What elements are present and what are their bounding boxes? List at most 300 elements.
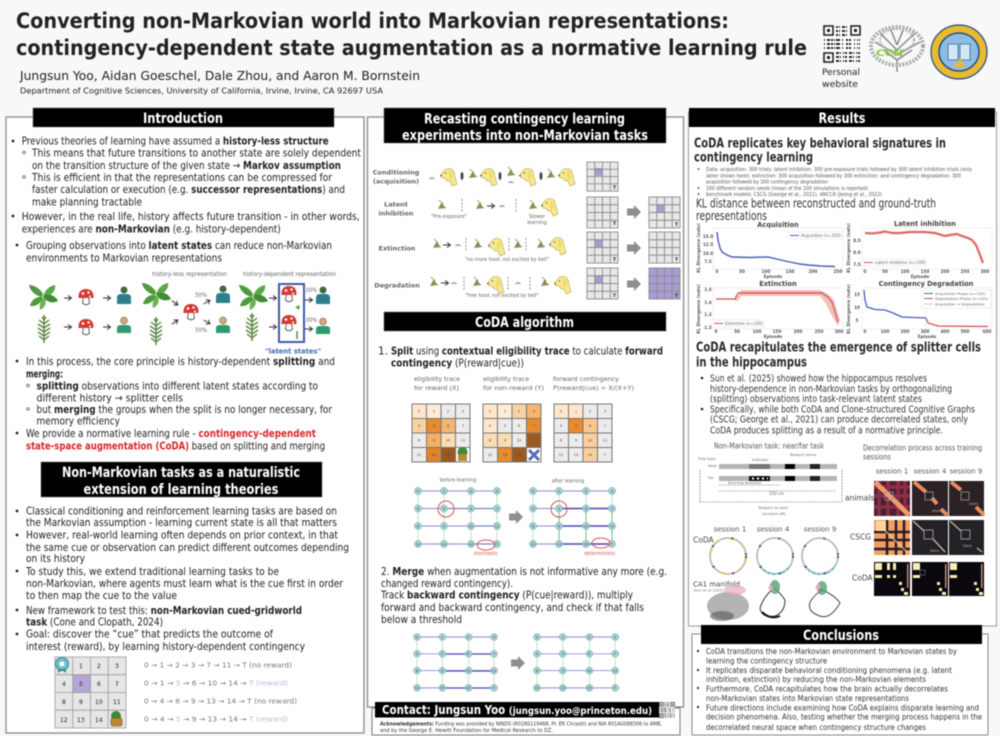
graph: merge after: 3 (614, 635, 616, 639)
chart: extinction: 1.4 (704, 300, 712, 305)
chart: extinction: 250 (815, 329, 823, 334)
chart: extinction (696, 280, 843, 339)
graph: merge after: 14 (587, 686, 592, 690)
illustration: conditioning row (428, 167, 575, 186)
figure: decorrelation heatmaps: sessions (863, 452, 891, 462)
figure: CoDA ring manifolds: session 9 (804, 526, 836, 534)
graph: merge before: 8 (416, 669, 419, 673)
graph: before learning: 8 (417, 524, 420, 528)
arrow (511, 656, 525, 670)
chart: acquisition: 15.0 (703, 234, 713, 239)
chart: contingency degradation: 300 (921, 329, 929, 334)
graph: merge after: 6 (588, 652, 591, 656)
grid captions: for reward (X) (414, 384, 459, 392)
trajectories list: 0 → 1 → 2 → 3 → 7 → 11 → T (no reward) (144, 662, 292, 670)
chart: contingency degradation: Episode (918, 334, 936, 339)
grid: eligibility trace for non-reward: 13 (503, 453, 507, 457)
grid: eligibility trace for non-reward: 6 (518, 424, 521, 428)
grid: forward contingency: 14 (588, 453, 593, 457)
trajectories list: 0 → 1 → 5 → 6 → 10 → 14 → T (reward) (144, 680, 288, 688)
grid captions: for non-reward (Y) (483, 384, 544, 392)
heading: non-markovian tasks: Non-Markovian tasks as a naturalistic (62, 465, 300, 481)
grid: eligibility trace for reward: 12 (417, 453, 421, 457)
text block: hippocampus (701, 374, 975, 436)
subheading: splitter cells (696, 340, 981, 370)
text block: markov assumption (12, 136, 361, 264)
heatmap: animals session 1 (874, 481, 910, 516)
figure: decorrelation heatmaps: CoDA (852, 574, 873, 582)
chart: cued gridworld: 2 (97, 663, 101, 670)
title (16, 9, 807, 60)
contingency grids: T (675, 257, 679, 263)
chart: latent inhibition: Latent inhibition (n=100) (875, 260, 926, 265)
graph: before learning: before learning (440, 478, 476, 484)
row labels: (acquisition) (373, 178, 419, 186)
graph: merge before: 1 (441, 635, 443, 639)
graph: merge before: 14 (466, 686, 471, 690)
grid: eligibility trace for reward: 0 (418, 410, 421, 414)
graph: merge before: 6 (467, 652, 470, 656)
text block: splitting and merging: merging: (26, 368, 63, 380)
text block: non-markovian tasks: on its history (26, 553, 85, 565)
chart: latent inhibition: 50 (882, 269, 888, 274)
graph: after learning: 7 (611, 507, 613, 511)
diagram: near/far task: Trial type (697, 456, 716, 461)
graph: merge before: 2 (467, 635, 469, 639)
chart: cued gridworld (55, 657, 126, 728)
figure: decorrelation heatmaps (845, 444, 984, 596)
chart: acquisition: Episode (764, 274, 782, 279)
affiliation: Department of Cognitive Sciences, University of California, Irvine, Irvine, CA 92697 USA (20, 86, 384, 96)
chart: contingency degradation: 500 (961, 329, 969, 334)
graph: before learning: 12 (416, 542, 420, 546)
grid: forward contingency: 10 (588, 438, 593, 442)
graph: merge before: 11 (492, 669, 496, 673)
figure: CoDA ring manifolds: session 1 (714, 526, 746, 534)
graph: merge after: T (613, 686, 617, 690)
grid: forward contingency: 0 (560, 410, 563, 414)
graph: merge after: 5 (562, 652, 564, 656)
chart: contingency degradation: Degradation Phase (n=100) (935, 296, 989, 301)
chart: extinction: 300 (835, 329, 843, 334)
text block: non-markovian tasks: the same cue or observation can predict different outcomes depending (26, 542, 349, 554)
grid: eligibility trace for reward: 6 (447, 424, 450, 428)
text block: merge: forward and backward contingency, and check if that falls (381, 602, 644, 614)
heading: non-markovian tasks: extension of learning theories (84, 482, 278, 498)
text block: split: 1. (378, 346, 388, 358)
panel frame (6, 117, 364, 733)
heading: conclusions: Conclusions (803, 628, 879, 644)
chart: extinction: Extinction (n=100) (725, 321, 763, 326)
chart: contingency degradation: 200 (901, 329, 909, 334)
grid: eligibility trace for reward: 14 (446, 453, 451, 457)
grid: eligibility trace for reward: 7 (462, 424, 464, 428)
grid: eligibility trace for reward: 5 (433, 424, 435, 428)
grid: eligibility trace for non-reward: 10 (517, 438, 522, 442)
chart: latent inhibition: 0 (864, 269, 867, 274)
graph: after learning: 11 (610, 524, 614, 528)
graph: after learning: 6 (585, 507, 588, 511)
text block: splitting and merging: memory efficiency (36, 416, 120, 428)
graph: merge after: 11 (613, 669, 617, 673)
chart: acquisition: Acquisition (n=100) (801, 233, 841, 238)
panel: results (688, 108, 996, 626)
text block: splitting and merging: different history → splitter cells (36, 392, 183, 404)
graph: before learning: 1 (443, 489, 445, 493)
methods notes: latter shown here); extinction: 300 acquisition followed by 300 extinction; and contingency degradation: 300 (706, 174, 961, 180)
graph: merge after: 12 (535, 686, 539, 690)
title: Converting non-Markovian world into Markovian representations: (16, 9, 729, 33)
subheading: behavioral signatures (694, 136, 946, 166)
grid: forward contingency: 9 (575, 438, 578, 442)
diagram: near/far task: Near (708, 463, 718, 468)
chart: cued gridworld: 3 (115, 663, 119, 670)
grid: forward contingency: 6 (589, 424, 592, 428)
grid: eligibility trace for non-reward: 8 (489, 438, 492, 442)
graph: before learning: 5 (443, 507, 445, 511)
chart: acquisition (696, 221, 843, 279)
graph: after learning: 1 (558, 489, 560, 493)
text block: hippocampus: Sun et al. (2025) showed how the hippocampus resolves (710, 374, 927, 384)
grid: eligibility trace for non-reward: 7 (533, 424, 535, 428)
heatmap: CoDA session 4 (912, 562, 948, 596)
acknowledgements: Acknowledgements: Funding was provided by NINDS (R01NS119468, PI: ER Chrastil) and NIA R01AG088306 to AMB, (380, 722, 662, 728)
graph: before learning: 9 (443, 524, 446, 528)
diagram: near/far task: Reward zones (790, 452, 816, 457)
graph: before learning: 6 (470, 507, 473, 511)
methods notes: benchmark models: CSCG (George et al., 2021), ANCCR (Jeong et al., 2022) (706, 192, 882, 198)
figure: history-less vs history-dependent representations: "latent states" (265, 348, 321, 356)
graph: after learning: T (610, 542, 614, 546)
graph: merge after: 9 (562, 669, 565, 673)
contact box (372, 702, 680, 735)
illustration: latent inhibition row: "Pre-exposure" (431, 214, 467, 220)
graph: after learning: deterministic (584, 551, 616, 557)
text block: split (378, 346, 663, 370)
contingency grids (587, 162, 680, 299)
heatmap: CoDA session 1 (874, 562, 910, 596)
chart: contingency degradation: 600 (983, 329, 991, 334)
figure: decorrelation heatmaps: Decorrelation process across training (863, 444, 982, 452)
diagram: near/far task: 230 cm (769, 491, 784, 496)
grid: eligibility trace for non-reward: 12 (488, 453, 492, 457)
grid: forward contingency: 11 (603, 438, 607, 442)
graph: after learning: 14 (584, 542, 589, 546)
grid: forward contingency (554, 404, 612, 462)
grid: forward contingency: T (603, 453, 607, 457)
graph: before learning: T (495, 542, 499, 546)
grid: eligibility trace for non-reward: 9 (504, 438, 507, 442)
chart: contingency degradation (846, 280, 992, 339)
heading: CoDA algorithm (384, 312, 666, 331)
contingency grids: T (613, 293, 617, 299)
text block: non-markovian tasks: task (Cone and Clopath, 2024) (26, 616, 163, 628)
chart: cued gridworld: 9 (79, 699, 83, 706)
graph: after learning: 4 (532, 507, 535, 511)
graph: before learning (414, 478, 501, 557)
text block: markov assumption: Previous theories of learning have assumed a history-less structure (22, 136, 329, 148)
grid captions: eligibility trace (483, 375, 529, 383)
row labels: inhibition (378, 210, 414, 218)
chart: extinction: 50 (734, 329, 740, 334)
graph: merge after: 1 (562, 635, 564, 639)
grid: eligibility trace for reward: 11 (461, 438, 465, 442)
figure: history-less vs history-dependent representations: history-dependent representation (243, 270, 336, 278)
grid: forward contingency: 12 (559, 453, 563, 457)
grid: forward contingency: 5 (575, 424, 577, 428)
chart: extinction: 150 (773, 329, 781, 334)
frame (372, 708, 680, 735)
graph: before learning: 0 (417, 489, 420, 493)
text block: non-markovian tasks (16, 506, 349, 653)
chart: latent inhibition: 8.5 (853, 238, 861, 243)
chart: latent inhibition: Episode (911, 274, 929, 279)
text block: markov assumption: This is efficient in that the representations can be compressed for (31, 172, 333, 184)
chart: contingency degradation: Acquisition Phase (n=100) (935, 291, 986, 296)
text block: conclusions: Furthermore, CoDA recapitulates how the brain actually decorrelates (706, 684, 948, 694)
figure: history-less vs history-dependent representations: 100% (303, 316, 317, 324)
text block: merge: below a threshold (381, 614, 462, 626)
figure: history-less vs history-dependent representations (29, 270, 336, 356)
graph: merge before: 12 (415, 686, 419, 690)
heatmap: CSCG session 4 (912, 520, 948, 555)
diagram: near/far task: Far (708, 475, 714, 480)
graph: merge before (413, 634, 498, 691)
text block: hippocampus: CoDA produces splitting as a result of a normative principle. (710, 426, 943, 436)
chart: extinction: Extinction (759, 280, 797, 288)
illustration: latent inhibition row: learning (527, 220, 547, 226)
text block: split: Split using contextual eligibility trace to calculate forward (391, 346, 663, 358)
grid: eligibility trace for non-reward (483, 404, 541, 462)
contingency grids: T (675, 293, 679, 299)
diagram: near/far task (697, 442, 842, 516)
figure: decorrelation heatmaps: session 1 (876, 468, 908, 476)
illustration: latent inhibition row: Slower (529, 214, 545, 220)
row labels: Conditioning (373, 168, 420, 176)
methods notes (698, 167, 973, 198)
trajectories list: 0 → 4 → 5 → 9 → 13 → 14 → T (reward) (144, 716, 288, 724)
icon: university seal (931, 25, 987, 79)
text block: hippocampus: (splitting) observations into task-relevant latent states (710, 394, 922, 405)
chart: acquisition: 100 (762, 269, 770, 274)
chart: acquisition: 150 (786, 269, 794, 274)
illustration: degradation row: "free food: not excited by bell" (465, 293, 539, 299)
text block: conclusions: It replicates disparate behavioral conditioning phenomena (e.g. latent (706, 665, 953, 675)
text block: conclusions: learning the contingency structure (706, 656, 827, 666)
grid: eligibility trace for non-reward: 2 (518, 410, 520, 414)
heading: introduction (33, 108, 334, 127)
chart: acquisition: 50 (739, 269, 745, 274)
graph: after learning (529, 478, 616, 557)
chart: latent inhibition: 100 (901, 269, 909, 274)
text block: markov assumption: This means that future transitions to another state are solely dependent (31, 148, 361, 160)
figure: history-less vs history-dependent representations: 50% (195, 291, 207, 299)
diagram: near/far task: Teleport to start (757, 505, 789, 510)
row labels (373, 168, 420, 290)
text block: non-markovian tasks: However, real-world learning often depends on prior context, in that (26, 530, 338, 542)
trajectories list: 0 → 4 → 8 → 9 → 13 → 14 → T (no reward) (144, 698, 297, 706)
acknowledgements (380, 722, 662, 734)
grid: eligibility trace for reward: 3 (462, 410, 464, 414)
graph: merge before: 3 (493, 635, 495, 639)
text block: split: contingency (P(reward|cue)) (391, 358, 524, 370)
chart: cued gridworld: 11 (113, 699, 121, 706)
personal website label: website (822, 80, 858, 90)
heatmap: CSCG session 4: Stem (930, 549, 940, 553)
panel: conclusions (692, 625, 988, 735)
text block: non-markovian tasks: interest (reward), by learning history-dependent contingency (26, 641, 305, 653)
diagram: near/far task: Running direction (728, 480, 762, 485)
text block: splitting and merging: In this process, the core principle is history-dependent splitting and (26, 356, 335, 368)
chart: latent inhibition: 7.5 (853, 262, 861, 267)
authors: Jungsun Yoo, Aidan Goeschel, Dale Zhou, and Aaron M. Bornstein (19, 69, 420, 83)
graph: merge before: T (492, 686, 496, 690)
illustration: extinction row (433, 237, 566, 263)
heatmap: animals session 9: Stem (969, 502, 979, 506)
panel: recasting and CoDA algorithm (368, 108, 684, 707)
chart: extinction: KL Divergence (nats) (696, 284, 701, 334)
row labels: Latent (384, 200, 408, 208)
chart: cued gridworld: 4 (62, 681, 66, 688)
latent states box (279, 284, 304, 342)
diagram: near/far task: Indicator (752, 457, 769, 462)
chart: latent inhibition: Latent inhibition (894, 220, 956, 228)
chart: extinction: 200 (794, 329, 802, 334)
grid captions: P(reward|cue) = X/(X+Y) (553, 384, 634, 392)
chart: cued gridworld: 10 (95, 699, 103, 706)
grid: forward contingency: 2 (589, 410, 591, 414)
grid: forward contingency: 13 (574, 453, 578, 457)
figure: history-less vs history-dependent representations: 100% (303, 286, 317, 294)
figure: history-less vs history-dependent representations: 50% (195, 326, 207, 334)
heatmap: CSCG session 9 (949, 520, 984, 555)
icon: CCN lab logo: CCN (876, 49, 903, 59)
text block: splitting and merging: but merging the groups when the split is no longer necessary, for (36, 404, 333, 416)
figure: CoDA ring manifolds: CoDA (693, 536, 714, 544)
text block: merge: Track backward contingency (P(cue|reward)), multiply (380, 590, 633, 602)
personal website label: Personal (822, 68, 860, 78)
acknowledgements: and by the George E. Hewitt Foundation for Medical Research to DZ. (380, 728, 553, 734)
heading: results (689, 108, 995, 127)
text block: markov assumption: experiences are non-Markovian (e.g. history-dependent) (22, 224, 281, 236)
chart: contingency degradation: Acquisition → Degradation (935, 302, 986, 306)
grid: eligibility trace for reward: 2 (447, 410, 449, 414)
illustration: latent inhibition row (431, 198, 558, 226)
grid captions (414, 375, 634, 392)
subheading: KL distance: representations (696, 209, 767, 223)
methods notes: acquisition followed by 300 contingency degradation (706, 180, 828, 186)
text block: merge: 2. Merge when augmentation is not informative any more (e.g. (381, 566, 667, 578)
icon: reward pot (111, 711, 122, 726)
chart: latent inhibition (846, 220, 992, 279)
figure: decorrelation heatmaps: animals (845, 494, 874, 502)
figure: history-less vs history-dependent representations: history-less representation (152, 270, 227, 278)
graph: merge after (533, 634, 619, 691)
methods notes: 100 different random seeds (mean of the 100 simulations is reported) (706, 186, 868, 192)
figure: CoDA ring manifolds: (Sun et al 2025) (693, 588, 724, 592)
heatmap: animals session 4: Stem (932, 509, 942, 513)
heatmap: CoDA session 9 (949, 562, 984, 596)
text block: markov assumption: make planning tractable (32, 196, 142, 208)
graph: after learning: 9 (558, 524, 561, 528)
contingency grids: T (613, 221, 617, 227)
text block: non-markovian tasks: to then map the cue to the value (26, 590, 177, 602)
graph: merge before: 10 (466, 669, 471, 673)
chart: latent inhibition: 250 (961, 269, 969, 274)
graph: merge after: 10 (587, 669, 592, 673)
text block: markov assumption: Grouping observations into latent states can reduce non-Markovian (26, 240, 332, 252)
graph: merge before: 5 (441, 652, 443, 656)
heatmap: animals session 4 (912, 481, 948, 516)
chart: contingency degradation: 0 (864, 329, 867, 334)
graph: before learning: 11 (495, 524, 499, 528)
graph: merge after: 13 (561, 686, 565, 690)
figure: CoDA ring manifolds: CA1 manifold (693, 580, 740, 588)
heading: introduction: Introduction (143, 111, 223, 127)
text block: non-markovian tasks: non-Markovian, where agents must learn what is the cue first in order (26, 578, 344, 590)
chart: cued gridworld: 8 (62, 699, 66, 706)
grid: eligibility trace for non-reward: 1 (504, 410, 506, 414)
chart: cued gridworld: 6 (97, 681, 101, 688)
graph: merge before: 7 (493, 652, 495, 656)
text block: markov assumption: However, in the real life, history affects future transition - in other words, (22, 211, 360, 223)
grid captions: eligibility trace (414, 375, 460, 383)
chart: extinction: 1.3 (704, 312, 712, 317)
figure: CoDA ring manifolds: session 4 (757, 526, 790, 534)
chart: acquisition: 7.5 (704, 259, 712, 264)
heading: conclusions (701, 625, 982, 644)
icon: small QR code (659, 702, 675, 718)
text block: conclusions: CoDA transitions the non-Markovian environment to Markovian states by (706, 646, 957, 656)
graph: after learning: 3 (611, 489, 613, 493)
diagram: near/far task: (screens off) (762, 511, 786, 516)
chart: latent inhibition: 150 (921, 269, 929, 274)
graph: before learning: 3 (496, 489, 498, 493)
icon: start badge (56, 658, 68, 673)
chart: acquisition: Acquisition (757, 221, 799, 229)
text block: markov assumption: environments to Markovian representations (26, 252, 222, 264)
heatmap: animals session 9 (949, 481, 984, 516)
graph: before learning: 4 (417, 507, 420, 511)
heatmap: CSCG session 9: Stem (963, 544, 973, 548)
graph: before learning: stochastic (474, 551, 498, 557)
graph: before learning: 13 (442, 542, 446, 546)
chart: extinction: 0 (715, 329, 718, 334)
grid: forward contingency: 3 (604, 410, 606, 414)
chart: extinction: 1.5 (704, 287, 712, 292)
text block: splitting and merging: splitting observations into different latent states according to (36, 380, 318, 392)
text block: non-markovian tasks: To study this, we extend traditional learning tasks to be (25, 566, 279, 578)
graph: merge before: 0 (416, 635, 419, 639)
graph: merge before: 13 (440, 686, 444, 690)
panel: introduction (6, 108, 364, 733)
chart: cued gridworld: 12 (60, 717, 68, 724)
chart: cued gridworld: 1 (79, 663, 83, 670)
chart: acquisition: KL Divergence (nats) (696, 223, 701, 273)
text block: conclusions: decorrelated neural space when contingency structure changes (706, 722, 926, 732)
chart: latent inhibition: 300 (981, 269, 989, 274)
grid: eligibility trace for reward (412, 404, 470, 462)
heading: CoDA algorithm: CoDA algorithm (475, 315, 574, 331)
contingency grids: T (613, 257, 617, 263)
grid: forward contingency: 7 (604, 424, 606, 428)
text block: conclusions (697, 646, 982, 732)
text block: non-markovian tasks: the Markovian assumption - learning current state is all that matters (26, 517, 337, 529)
grid: eligibility trace for reward: 8 (418, 438, 421, 442)
graph: after learning: 13 (557, 542, 561, 546)
text block: non-markovian tasks: Classical conditioning and reinforcement learning tasks are based on (26, 506, 337, 518)
heatmap: CSCG session 1 (874, 520, 910, 555)
